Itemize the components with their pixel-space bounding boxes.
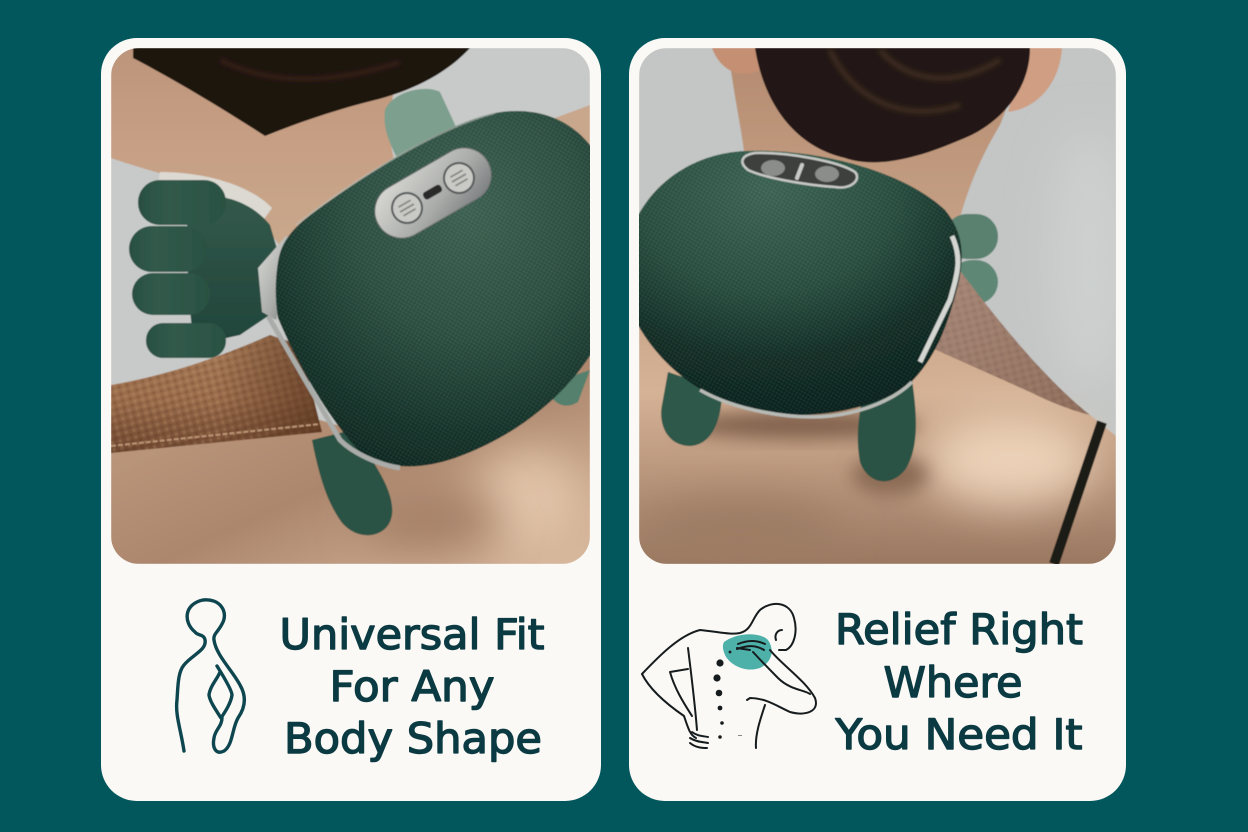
charging port <box>422 184 442 200</box>
silver rim <box>268 316 400 468</box>
massage fingers right <box>945 214 998 259</box>
hair <box>755 48 1030 162</box>
heading: universal fit: Body Shape <box>284 714 542 763</box>
heading: universal fit: For Any <box>330 662 494 711</box>
icon: back and neck pain figure <box>642 604 816 748</box>
lower massage fingers <box>661 372 722 446</box>
massager body, mesh fabric <box>625 151 962 415</box>
panel: relief card <box>625 38 1130 801</box>
right button <box>442 162 476 194</box>
neck <box>730 70 1006 220</box>
lower massage finger <box>312 430 392 535</box>
photo: massager on shoulder, side view <box>111 48 605 564</box>
leather strap <box>925 268 1090 415</box>
icon: body outline <box>177 600 244 752</box>
left button <box>390 192 424 224</box>
silver rim <box>700 382 912 417</box>
leather strap <box>111 335 322 453</box>
massager body, mesh fabric <box>276 111 605 466</box>
hair <box>133 48 470 136</box>
bra strap <box>1054 422 1102 564</box>
massager hand with four fingers <box>129 172 292 358</box>
left button <box>761 160 785 176</box>
control panel <box>742 153 857 188</box>
heading: relief right where you need it: You Need It <box>834 710 1082 759</box>
silver collar <box>257 236 288 320</box>
centre port <box>797 165 802 178</box>
back and shoulders <box>639 326 1116 564</box>
heading: relief right where you need it: Relief Right <box>835 605 1083 654</box>
heading: universal fit: Universal Fit <box>280 610 544 659</box>
panel: universal fit card <box>101 38 605 801</box>
rear massage finger <box>384 88 456 157</box>
control panel <box>374 146 492 240</box>
ears <box>712 48 765 74</box>
lower back skin <box>111 340 590 564</box>
small finger under device <box>552 370 590 406</box>
pain highlight <box>723 634 772 670</box>
heading: universal fit <box>280 610 544 763</box>
photo: massager on neck, back view <box>625 48 1130 564</box>
heading: relief right where you need it: Where <box>884 658 1022 707</box>
neck and upper shoulder skin <box>111 48 400 260</box>
right button <box>815 166 839 182</box>
far shoulder patch <box>555 104 590 146</box>
heading: relief right where you need it <box>834 605 1083 759</box>
spine dots <box>713 651 742 739</box>
